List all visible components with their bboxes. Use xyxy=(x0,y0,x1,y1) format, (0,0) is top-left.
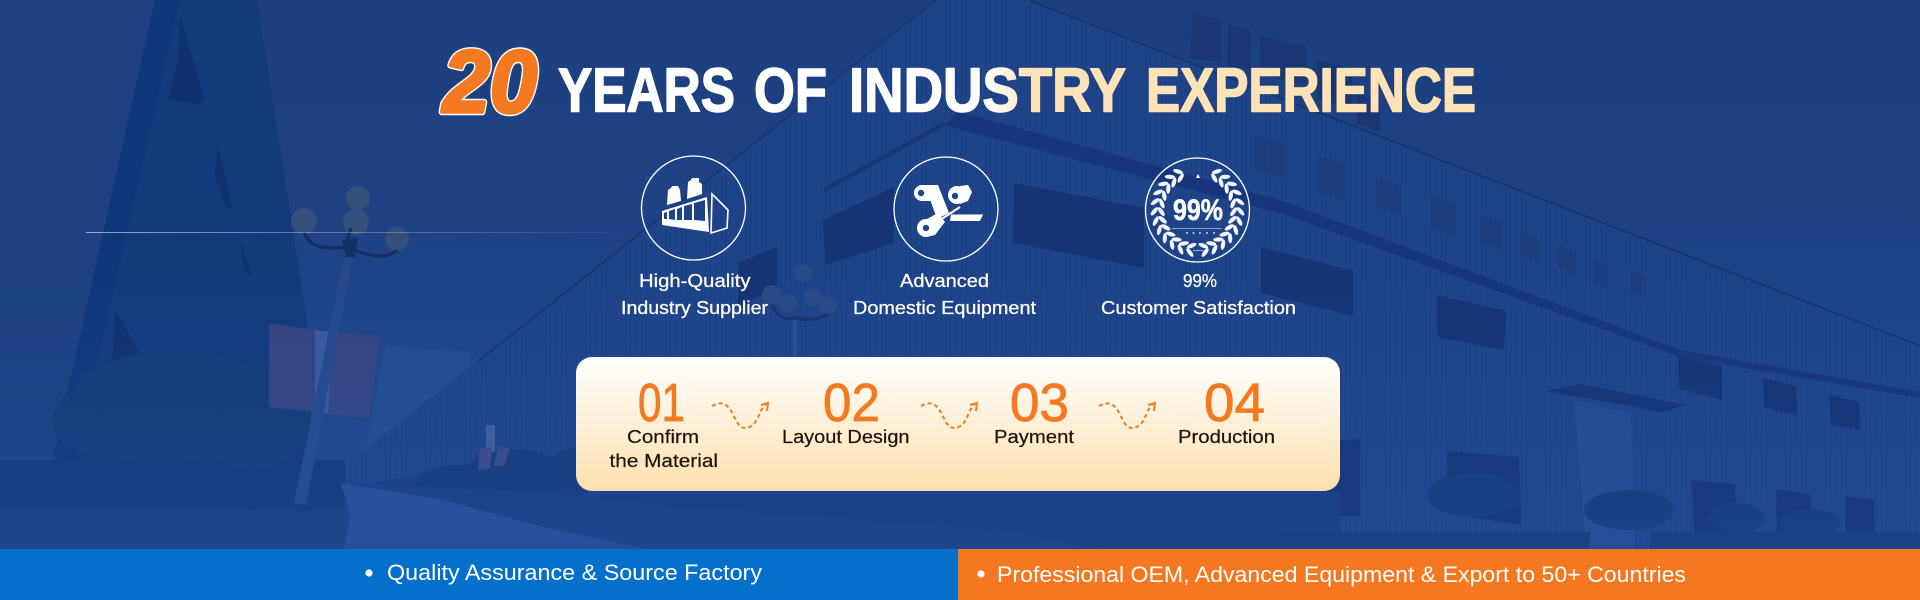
left building xyxy=(0,0,155,457)
feature: high-quality supplier xyxy=(621,156,768,318)
heading words: EXPERIENCE xyxy=(1146,56,1476,126)
bottom bar: blue xyxy=(0,549,958,600)
step 01: the Material xyxy=(610,451,718,471)
badge: 20: 20 xyxy=(441,32,537,131)
hedges and road xyxy=(340,483,1100,549)
heading words xyxy=(558,56,1476,126)
step 04: 04 xyxy=(1204,373,1265,433)
factory windows xyxy=(738,183,1875,546)
thin horizontal rule xyxy=(86,232,646,233)
bottom bar: blue: Quality Assurance & Source Factory xyxy=(387,560,762,585)
title xyxy=(441,32,1476,131)
step 04 xyxy=(1178,373,1275,447)
arrow 1 xyxy=(712,403,768,428)
facade lettering blocks xyxy=(1255,135,1646,298)
heading words: INDUSTRY xyxy=(849,56,1126,126)
distant street xyxy=(486,425,495,495)
bottom bar: orange xyxy=(958,549,1920,600)
feature: customer satisfaction: Customer Satisfaction xyxy=(1101,298,1296,318)
feature: high-quality supplier: Industry Supplier xyxy=(621,298,768,318)
heading words: YEARS xyxy=(558,56,735,126)
icon: laurel wreath xyxy=(1149,165,1246,259)
feature: advanced equipment xyxy=(853,157,1036,318)
label: Advanced xyxy=(900,271,989,291)
step 03: 03 xyxy=(1010,373,1069,433)
step 02: 02 xyxy=(823,373,880,433)
badge: 20: 20 xyxy=(441,32,537,131)
banners xyxy=(269,323,315,412)
step 03: Payment xyxy=(994,427,1074,447)
step 03 xyxy=(994,373,1074,447)
right trees xyxy=(1280,473,1920,549)
icon: laurel wreath: 99% xyxy=(1173,194,1223,227)
step 01: 01 xyxy=(638,373,685,433)
lamp posts xyxy=(291,186,837,505)
step 02: Layout Design xyxy=(782,427,910,447)
left trees xyxy=(53,351,311,470)
label: High-Quality xyxy=(639,271,750,291)
step 04: Production xyxy=(1178,427,1275,447)
step 01: Confirm xyxy=(627,427,699,447)
icon: rollers and cutter xyxy=(914,185,983,237)
bottom bar: orange: Professional OEM, Advanced Equipment & Export to 50+ Countries xyxy=(997,562,1686,587)
label: 99% xyxy=(1183,271,1217,291)
step 02 xyxy=(782,373,910,447)
arrow 3 xyxy=(1099,403,1155,428)
step 01 xyxy=(610,373,718,471)
arrow 2 xyxy=(921,403,977,428)
roof sign blocks xyxy=(1190,13,1380,132)
icon: factory xyxy=(662,178,728,233)
panel: process steps xyxy=(576,357,1340,491)
heading words: OF xyxy=(754,56,827,126)
feature: advanced equipment: Domestic Equipment xyxy=(853,298,1036,318)
feature: customer satisfaction xyxy=(1101,158,1296,318)
